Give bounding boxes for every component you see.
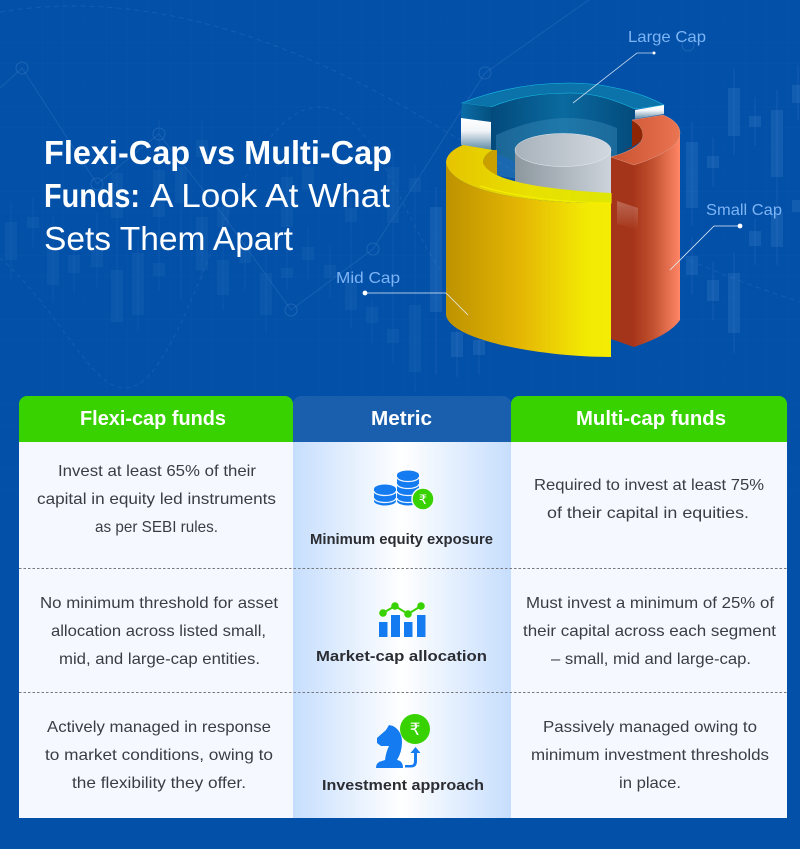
title: Funds: bbox=[44, 177, 140, 214]
3D cylinder chart: market-cap segments bbox=[446, 83, 680, 357]
metric label: investment approach: Investment approach bbox=[322, 777, 484, 794]
text: flexi-cap allocation: allocation across listed small, bbox=[51, 623, 266, 640]
text: flexi-cap approach: Actively managed in response bbox=[47, 719, 271, 736]
segment: small cap (red) bbox=[611, 115, 680, 347]
text: multi-cap allocation: Must invest a minimum of 25% of bbox=[526, 595, 775, 612]
text: multi-cap allocation: their capital across each segment bbox=[523, 623, 777, 640]
segment: core cylinder (grey) bbox=[515, 134, 611, 196]
text: multi-cap allocation bbox=[523, 595, 777, 668]
text: multi-cap approach: minimum investment thresholds bbox=[531, 747, 769, 764]
panel: metric column bbox=[293, 396, 511, 818]
segment: mid cap (yellow) bbox=[446, 145, 611, 357]
text: multi-cap equity exposure: Required to invest at least 75% bbox=[534, 477, 764, 494]
panel: multi-cap column: Multi-cap funds bbox=[576, 408, 726, 430]
text: multi-cap approach: Passively managed owing to bbox=[543, 719, 757, 736]
metric label: minimum equity exposure: Minimum equity exposure bbox=[310, 531, 493, 548]
text: flexi-cap equity exposure bbox=[37, 463, 276, 536]
text: multi-cap equity exposure: of their capital in equities. bbox=[547, 505, 749, 522]
text: flexi-cap allocation: No minimum threshold for asset bbox=[40, 595, 279, 612]
text: multi-cap approach bbox=[531, 719, 769, 792]
label: Mid Cap bbox=[336, 270, 468, 315]
text: flexi-cap equity exposure: as per SEBI rules. bbox=[95, 519, 218, 536]
label: Large Cap bbox=[573, 29, 706, 103]
text: flexi-cap allocation: mid, and large-cap entities. bbox=[59, 651, 260, 668]
text: multi-cap allocation: – small, mid and large-cap. bbox=[551, 651, 751, 668]
text: multi-cap approach: in place. bbox=[619, 775, 681, 792]
icon: chess knight with rupee coin bbox=[376, 714, 430, 768]
text: flexi-cap equity exposure: capital in equity led instruments bbox=[37, 491, 276, 508]
title bbox=[44, 134, 392, 257]
text: flexi-cap equity exposure: Invest at least 65% of their bbox=[58, 463, 257, 480]
title: Flexi-Cap vs Multi-Cap bbox=[44, 134, 392, 171]
panel: multi-cap column bbox=[511, 396, 787, 818]
label: Small Cap bbox=[670, 202, 782, 270]
icon: coins with rupee: ₹ bbox=[419, 493, 427, 508]
label: Small Cap: Small Cap bbox=[706, 202, 782, 219]
text: flexi-cap approach: the flexibility they offer. bbox=[72, 775, 246, 792]
label: Large Cap: Large Cap bbox=[628, 29, 706, 46]
text: multi-cap equity exposure bbox=[534, 477, 764, 522]
text: flexi-cap approach bbox=[45, 719, 273, 792]
metric label: market-cap allocation: Market-cap allocation bbox=[316, 648, 487, 665]
text: flexi-cap approach: to market conditions, owing to bbox=[45, 747, 273, 764]
icon: coins with rupee bbox=[374, 470, 434, 510]
panel: flexi-cap column: Flexi-cap funds bbox=[80, 408, 226, 430]
title: Sets Them Apart bbox=[44, 220, 293, 257]
comparison table bbox=[19, 396, 787, 818]
title: A Look At What bbox=[150, 177, 390, 214]
text: flexi-cap allocation bbox=[40, 595, 279, 668]
panel: flexi-cap column bbox=[19, 396, 293, 818]
icon: chess knight with rupee coin: ₹ bbox=[410, 720, 420, 740]
panel: metric column: Metric bbox=[371, 408, 432, 430]
label: Mid Cap: Mid Cap bbox=[336, 270, 400, 287]
icon: bar chart with trend line bbox=[379, 602, 426, 637]
segment: large cap (blue) bbox=[461, 83, 664, 181]
